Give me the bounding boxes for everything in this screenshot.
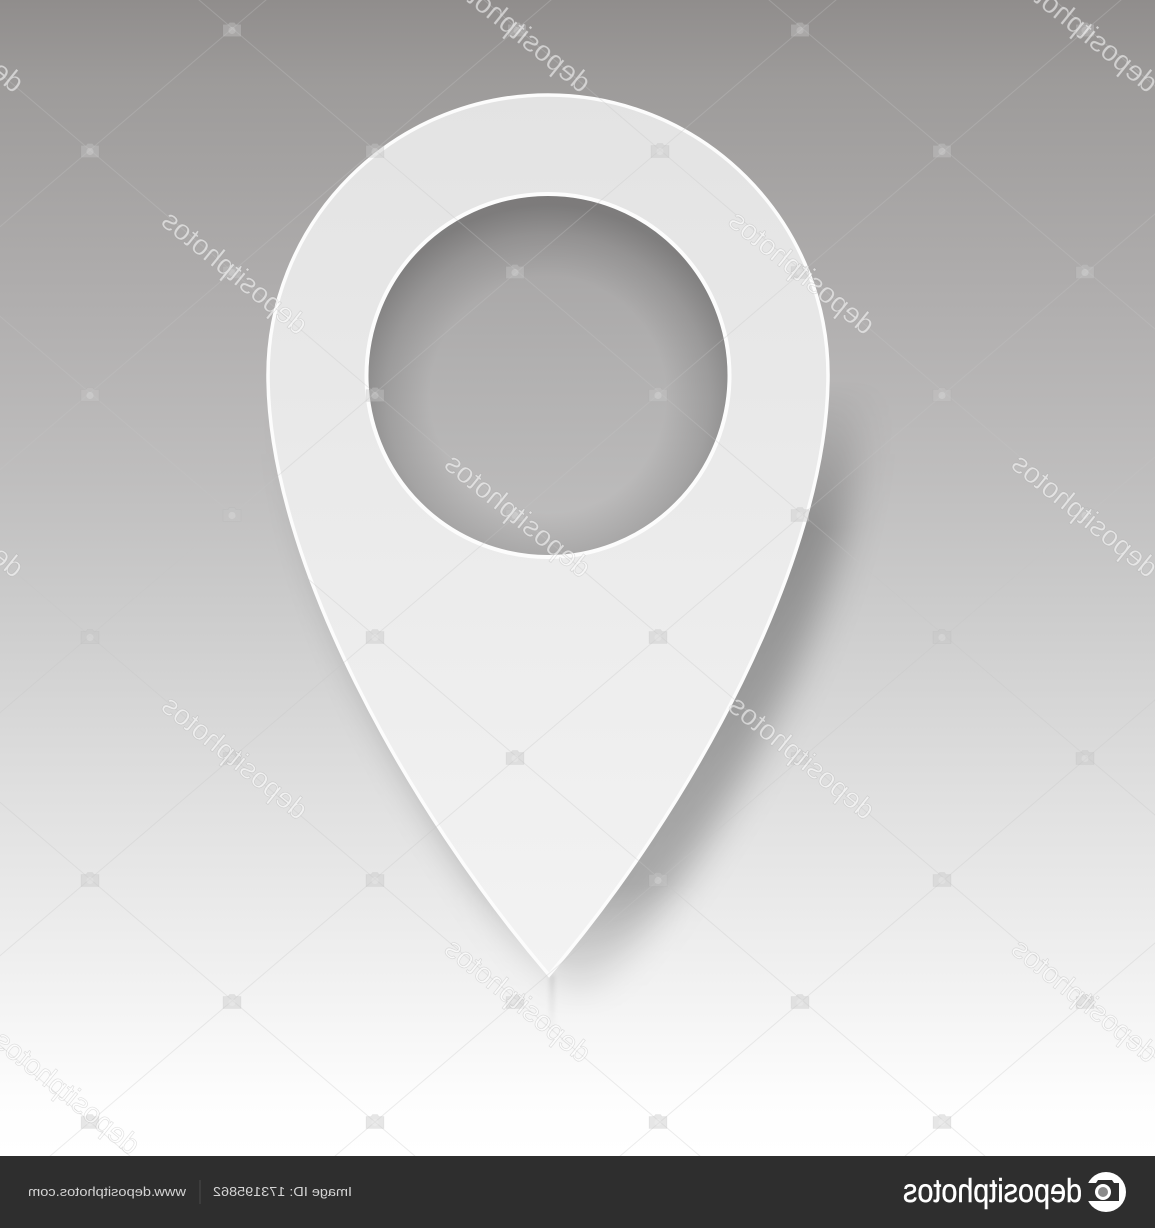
footer bar: [0, 1156, 1155, 1228]
mirrored diagonal watermarks: depositphotos: [722, 690, 881, 826]
icon: camera: [1086, 1172, 1126, 1212]
footer website and image id: www.depositphotos.com: [28, 1184, 187, 1199]
footer website and image id: [28, 1180, 352, 1204]
footer logo: [903, 1172, 1126, 1212]
pin body: [268, 95, 828, 975]
pin circular hole: [366, 194, 730, 557]
mirrored diagonal watermarks: depositphotos: [155, 690, 314, 826]
logo wordmark: depositphotos: [903, 1172, 1082, 1209]
pin drop shadow: [307, 406, 866, 1011]
watermark camera icons: [81, 22, 1094, 1128]
location pin: [268, 95, 828, 975]
mirrored diagonal watermarks: depositphotos: [155, 205, 314, 341]
mirrored diagonal watermarks: depositphotos: [438, 933, 597, 1069]
mirrored diagonal watermarks: depositphotos: [722, 205, 881, 341]
mirrored diagonal watermarks: depositphotos: [438, 448, 597, 584]
footer website and image id: Image ID: 173195862: [213, 1184, 352, 1199]
